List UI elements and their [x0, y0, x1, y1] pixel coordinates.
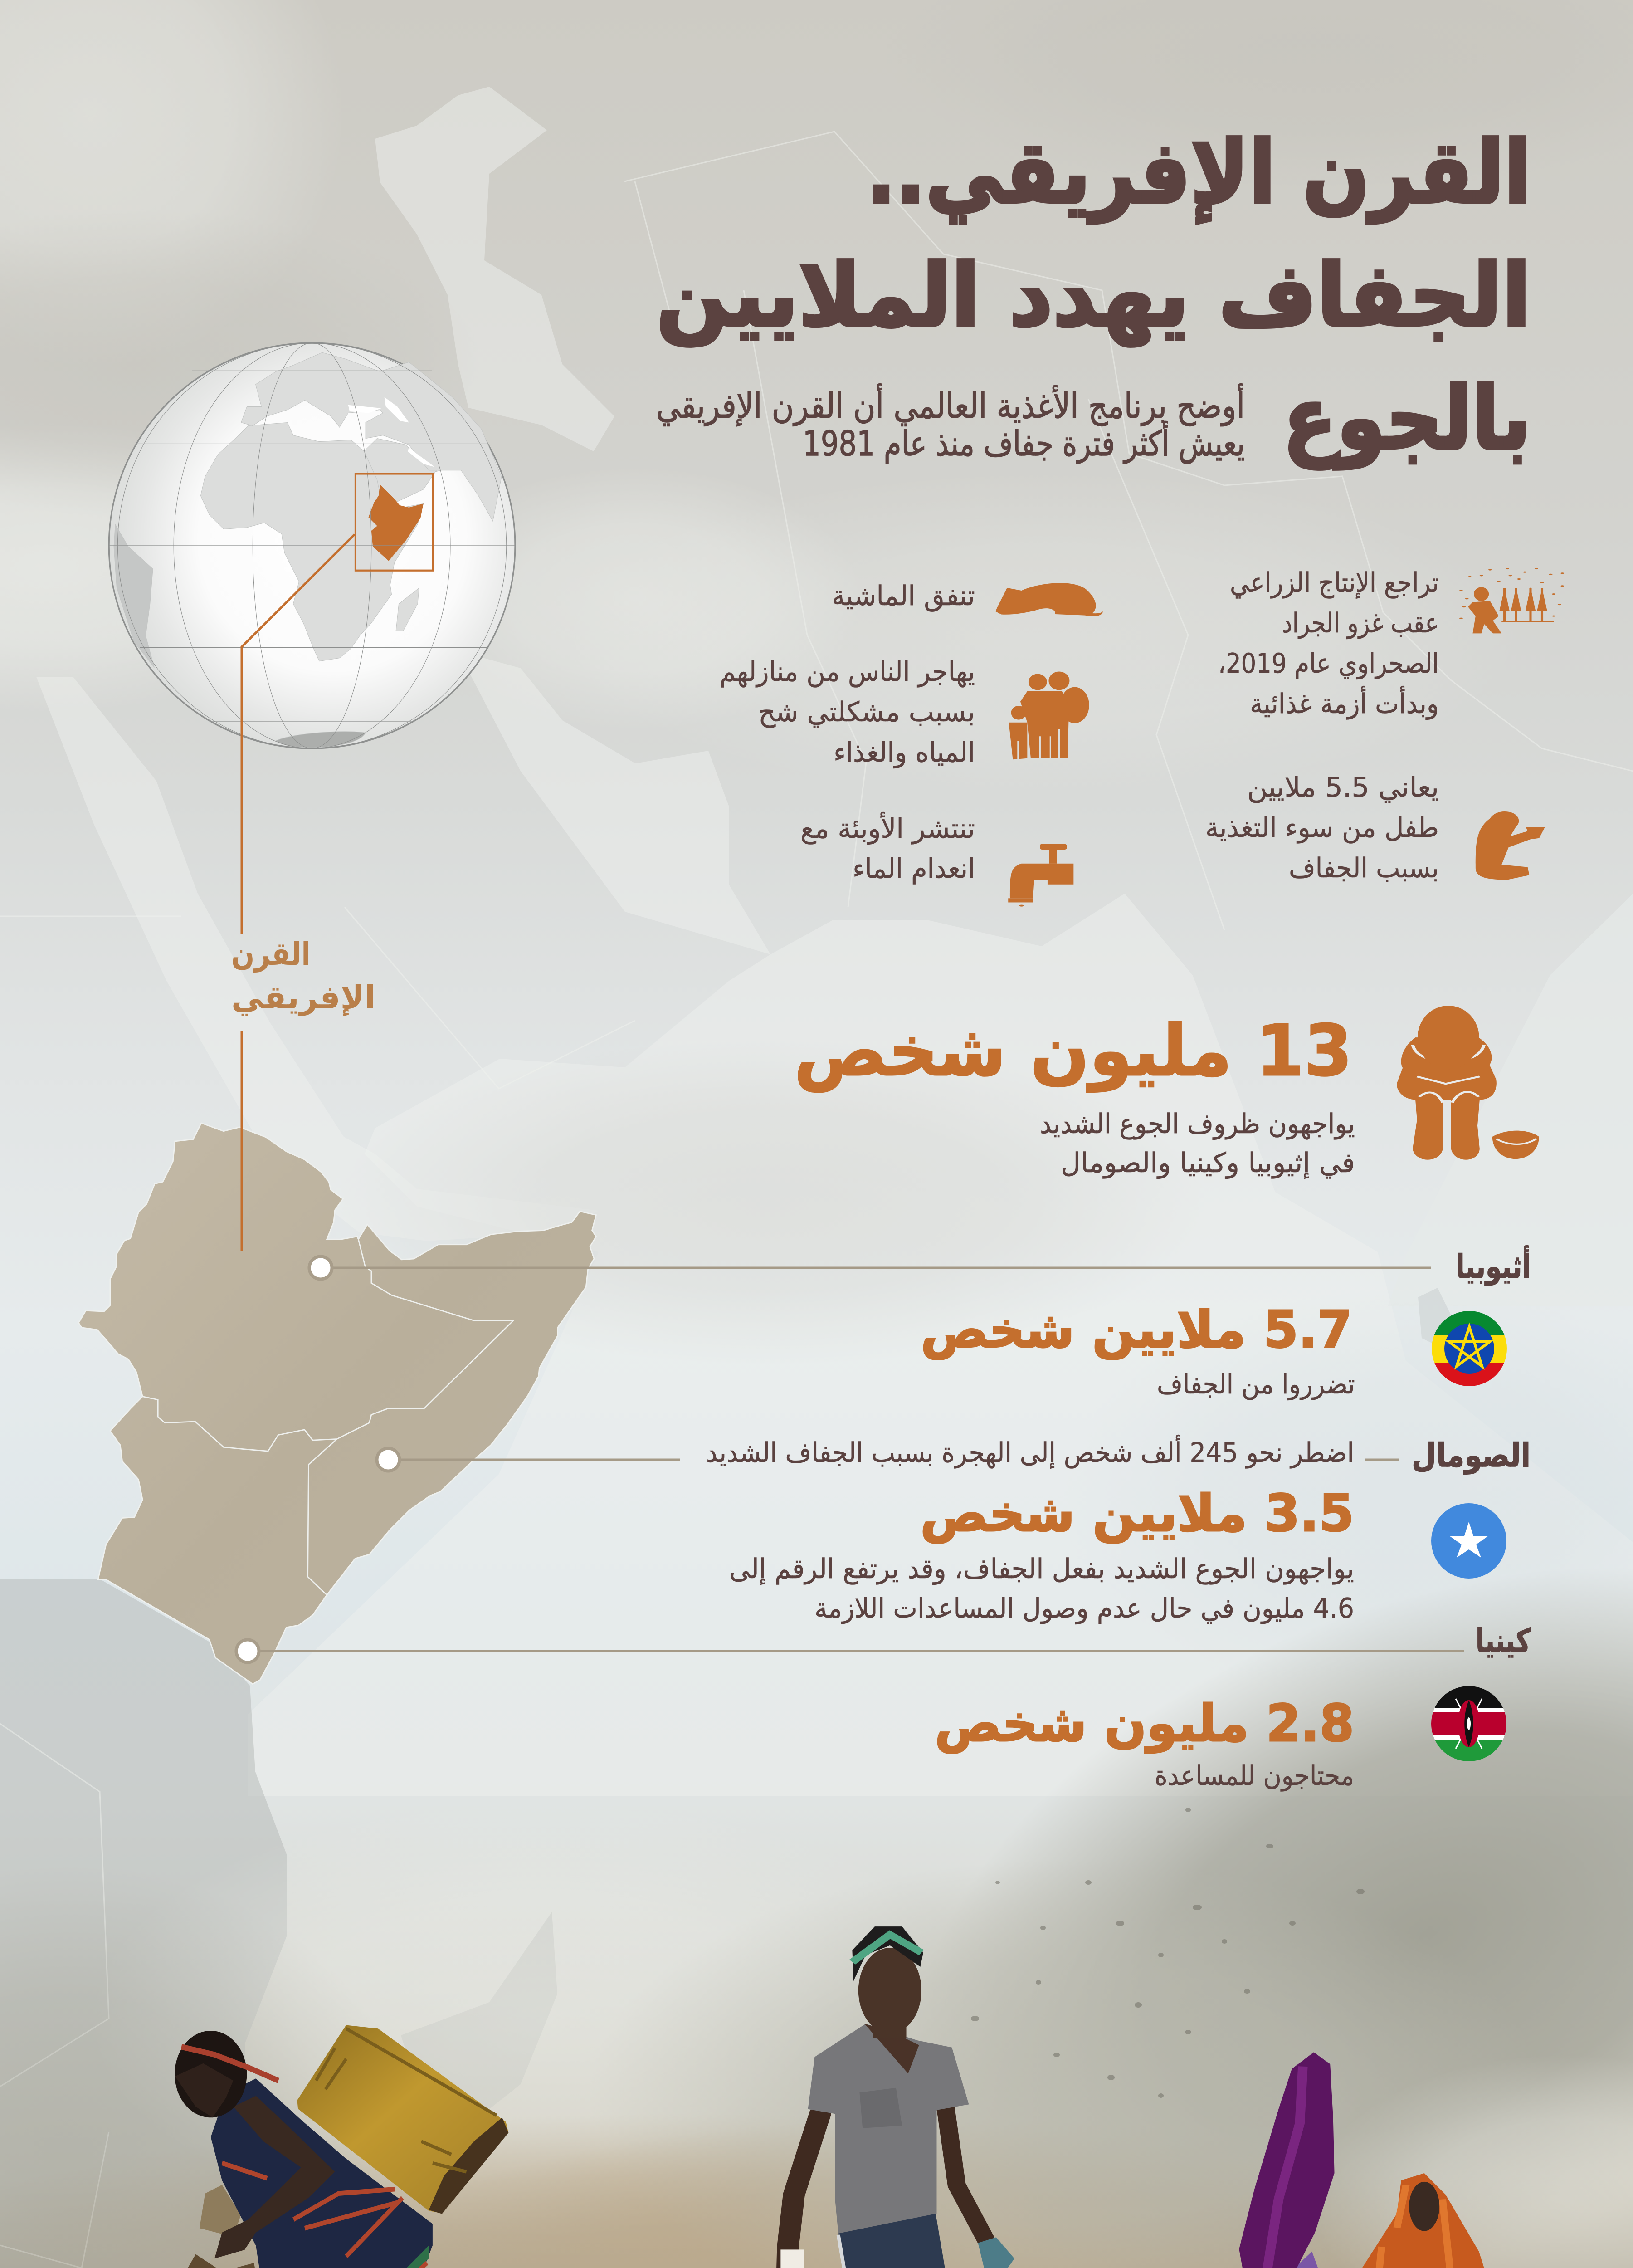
text: عقب غزو الجراد	[1282, 607, 1439, 639]
Horn of Africa land shape	[78, 1123, 596, 1684]
flag: Ethiopia	[1432, 1311, 1507, 1386]
text	[800, 812, 975, 885]
panel: Somalia figures: 3.5 ملايين شخص	[920, 1484, 1354, 1544]
text: تراجع الإنتاج الزراعي	[1230, 567, 1439, 599]
icon: child with bowl	[1476, 811, 1545, 880]
text: انعدام الماء	[853, 853, 975, 885]
text: طفل من سوء التغذية	[1205, 812, 1439, 844]
icon: family	[1009, 671, 1089, 759]
description	[1040, 1108, 1355, 1179]
panel: 13 million	[794, 1006, 1539, 1179]
icon: water tap	[1008, 844, 1073, 907]
text: تنتشر الأوبئة مع	[800, 812, 975, 845]
country label: Ethiopia: أثيوبيا	[1456, 1245, 1531, 1286]
panel: epidemics	[800, 812, 1073, 907]
text: تنفق الماشية	[832, 580, 975, 612]
text: بسبب الجفاف	[1289, 852, 1439, 884]
text: وبدأت أزمة غذائية	[1250, 686, 1439, 720]
photo: man with two blue buckets	[720, 1926, 1068, 2268]
connector: Somalia	[377, 1448, 1399, 1471]
subtitle: يعيش أكثر فترة جفاف منذ عام 1981	[803, 421, 1245, 464]
connector: Ethiopia	[309, 1256, 1431, 1279]
country label: Somalia: الصومال	[1412, 1436, 1531, 1475]
background map: seas	[36, 87, 1633, 1796]
highlight box	[356, 474, 433, 571]
photo: woman in purple veil	[1239, 2052, 1336, 2268]
text: بسبب مشكلتي شح	[758, 696, 975, 728]
title	[656, 122, 1531, 469]
text: المياه والغذاء	[834, 737, 975, 768]
panel: Somalia figures: يواجهون الجوع الشديد بفعل الجفاف، وقد يرتفع الرقم إلى	[729, 1553, 1354, 1585]
label: Horn of Africa: الإفريقي	[231, 979, 375, 1017]
text: يهاجر الناس من منازلهم	[720, 656, 975, 688]
label: Horn of Africa: القرن	[231, 935, 311, 973]
text	[1205, 772, 1439, 884]
icon: dead animal	[995, 583, 1103, 616]
note: Somalia migration: اضطر نحو 245 ألف شخص إلى الهجرة بسبب الجفاف الشديد	[706, 1435, 1354, 1469]
flag: Somalia	[1431, 1503, 1506, 1579]
background: dust cloud	[0, 1426, 1633, 2268]
country label: Kenya: كينيا	[1476, 1622, 1531, 1660]
flag: Kenya	[1431, 1686, 1506, 1761]
icon: farmer wheat locusts	[1459, 568, 1564, 633]
panel: livestock	[832, 580, 1103, 616]
background map: India east side and Africa	[0, 894, 1633, 2268]
title: بالجوع	[1283, 368, 1531, 469]
map: Horn of Africa	[78, 1123, 596, 1684]
description: في إثيوبيا وكينيا والصومال	[1061, 1147, 1355, 1179]
panel: malnutrition	[1205, 772, 1545, 884]
connector: Kenya	[236, 1640, 1464, 1662]
globe	[109, 343, 515, 748]
panel: Kenya figures: محتاجون للمساعدة	[1155, 1760, 1354, 1792]
photo: woman carrying yellow jerrycan	[173, 2025, 525, 2268]
title: الجفاف يهدد الملايين	[656, 245, 1531, 347]
panel: agriculture locusts	[1218, 567, 1564, 720]
text	[720, 656, 975, 768]
subtitle	[656, 383, 1245, 464]
grid lines	[109, 343, 515, 748]
panel: Kenya figures	[935, 1694, 1354, 1792]
title: القرن الإفريقي..	[866, 122, 1531, 224]
panel: Ethiopia figures: تضرروا من الجفاف	[1157, 1369, 1355, 1400]
description: يواجهون ظروف الجوع الشديد	[1040, 1108, 1355, 1140]
panel: Somalia figures	[729, 1484, 1354, 1624]
label: Horn of Africa	[231, 935, 375, 1017]
text: يعاني 5.5 ملايين	[1247, 772, 1439, 803]
highlighted Horn of Africa	[368, 484, 424, 561]
panel: Ethiopia figures	[921, 1300, 1355, 1400]
panel: migration	[720, 656, 1089, 768]
icon: hungry person with bowl	[1397, 1006, 1539, 1160]
subtitle: أوضح برنامج الأغذية العالمي أن القرن الإفريقي	[656, 383, 1245, 426]
photo: woman in orange veil with can	[1350, 2173, 1545, 2268]
panel: Somalia figures: 4.6 مليون في حال عدم وصول المساعدات اللازمة	[814, 1593, 1354, 1624]
panel: Ethiopia figures: 5.7 ملايين شخص	[921, 1300, 1352, 1360]
panel: Kenya figures: 2.8 مليون شخص	[935, 1694, 1354, 1754]
headline: 13 مليون شخص	[794, 1010, 1352, 1092]
background: dust specks	[971, 1808, 1365, 2098]
country borders	[142, 1239, 513, 1595]
globe disc	[109, 343, 515, 748]
leader line from globe to region	[242, 534, 355, 1251]
text: الصحراوي عام 2019،	[1218, 648, 1439, 679]
continents	[114, 352, 502, 748]
text	[1218, 567, 1439, 720]
